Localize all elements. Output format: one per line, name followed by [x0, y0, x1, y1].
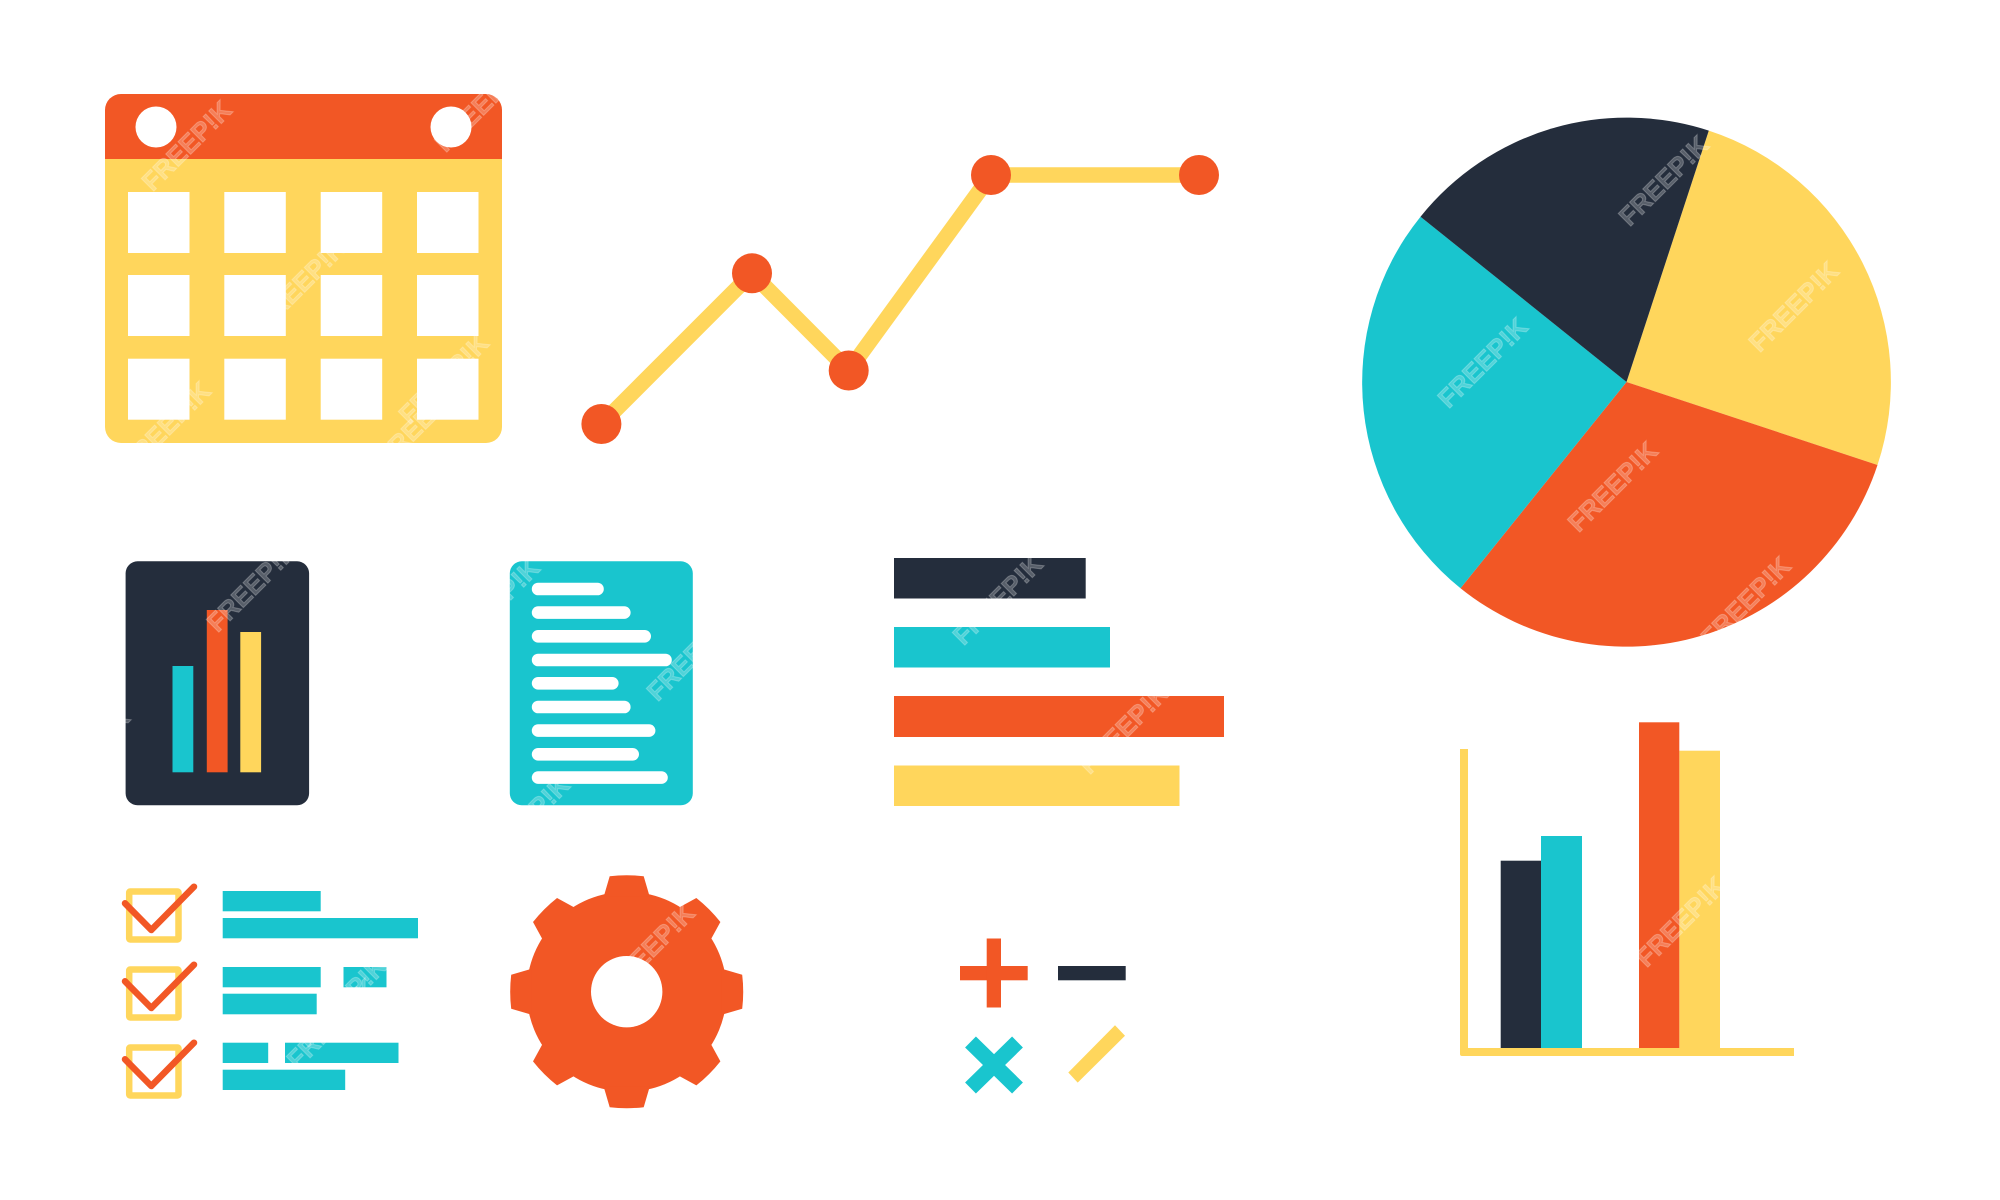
icon: gear	[510, 875, 743, 1108]
watermarks: FREEP!K	[947, 549, 1049, 651]
watermarks: FREEP!K	[281, 973, 383, 1075]
watermarks: FREEP!K	[250, 233, 352, 335]
watermarks: FREEP!K	[1073, 678, 1175, 780]
calendar header	[105, 94, 502, 159]
line chart	[581, 155, 1219, 444]
watermarks: FREEP!K	[291, 951, 393, 1053]
icon: multiply sign	[970, 1042, 1018, 1088]
checklist	[125, 887, 418, 1096]
watermarks: FREEP!K	[599, 898, 701, 1000]
watermarks: FREEP!K	[1613, 130, 1715, 232]
watermarks: FREEP!K	[1562, 436, 1664, 538]
calendar day cells	[128, 192, 478, 420]
panel: calendar icon	[105, 94, 502, 443]
icon: plus sign	[960, 938, 1028, 1008]
watermarks: FREEP!K	[136, 95, 238, 197]
watermarks: FREEP!K	[34, 703, 136, 805]
watermarks: FREEP!K	[1743, 256, 1845, 358]
watermarks: FREEP!K	[1432, 312, 1534, 414]
vertical bar chart	[1460, 722, 1794, 1056]
watermarks: FREEP!K	[474, 770, 576, 872]
watermarks: FREEP!K	[201, 536, 303, 638]
calendar body	[105, 150, 502, 443]
watermarks	[34, 56, 1845, 1075]
watermarks: FREEP!K	[393, 328, 495, 430]
pie chart	[1362, 118, 1891, 647]
icon: tablet with bar chart	[126, 561, 309, 805]
checklist item 1	[125, 887, 418, 940]
checklist item 3	[125, 1043, 398, 1096]
watermarks: FREEP!K	[1695, 551, 1797, 653]
icon: document	[510, 561, 693, 805]
checklist item 2	[125, 965, 386, 1018]
icon: divide slash	[1068, 1025, 1125, 1083]
watermarks: FREEP!K	[371, 370, 473, 472]
watermarks: FREEP!K	[1630, 871, 1732, 973]
horizontal bar chart	[894, 558, 1224, 806]
watermarks: FREEP!K	[429, 56, 531, 158]
icon: minus sign	[1058, 966, 1126, 980]
watermarks: FREEP!K	[115, 376, 217, 478]
watermarks: FREEP!K	[641, 605, 743, 707]
watermarks: FREEP!K	[444, 553, 546, 655]
